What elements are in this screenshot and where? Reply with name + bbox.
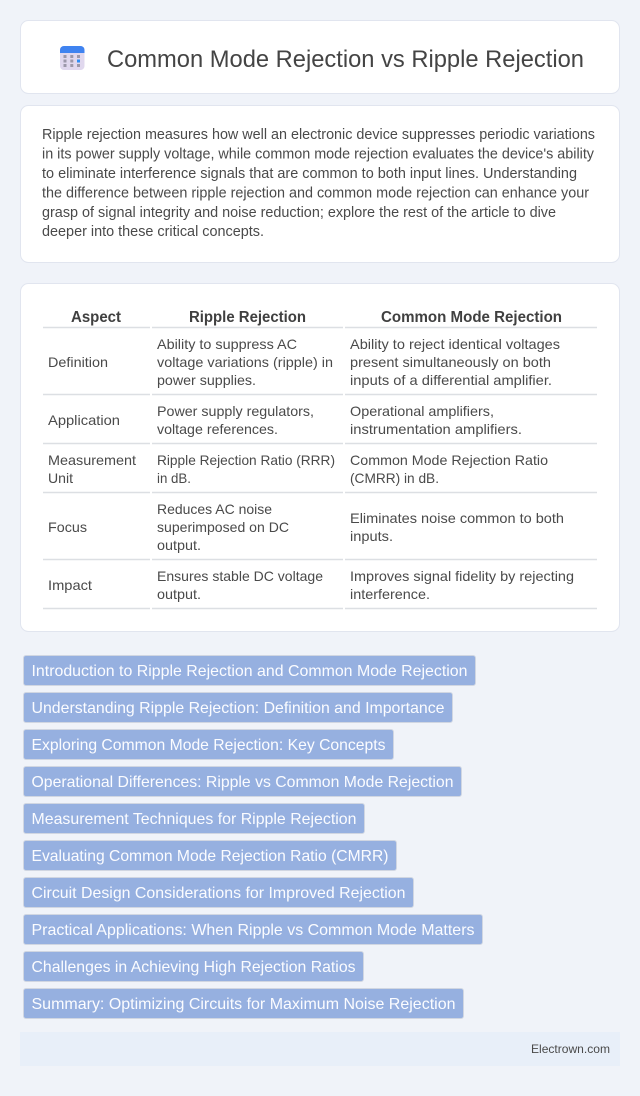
table row: definition: present simultaneously on both bbox=[350, 354, 551, 370]
link: exploring common mode rejection: Exploring Common Mode Rejection: Key Concepts bbox=[32, 737, 386, 754]
table row: application bbox=[48, 403, 522, 437]
link: measurement techniques bbox=[24, 804, 364, 834]
table row: impact: Improves signal fidelity by rejecting bbox=[350, 568, 574, 584]
link: operational differences: Operational Differences: Ripple vs Common Mode Rejection bbox=[32, 774, 454, 791]
table row: definition: Definition bbox=[48, 354, 108, 370]
table row: measurement unit: Measurement bbox=[48, 452, 136, 468]
table row: definition: power supplies. bbox=[157, 372, 256, 388]
intro text block: the difference between ripple rejection and common mode rejection can enhance your bbox=[42, 186, 589, 202]
table row: focus: Reduces AC noise bbox=[157, 501, 272, 517]
table row: definition bbox=[48, 336, 560, 388]
table row: measurement unit: Ripple Rejection Ratio (RRR) bbox=[157, 452, 335, 468]
table row: impact: output. bbox=[157, 586, 201, 602]
table row: definition: Ability to reject identical voltages bbox=[350, 336, 560, 352]
table row: impact: Impact bbox=[48, 577, 92, 593]
link: understanding ripple rejection: Understanding Ripple Rejection: Definition and Importance bbox=[32, 700, 445, 717]
link: circuit design bbox=[24, 878, 414, 908]
table row: focus: Focus bbox=[48, 519, 87, 535]
table row: measurement unit: (CMRR) in dB. bbox=[350, 470, 439, 486]
link: summary: Summary: Optimizing Circuits for Maximum Noise Rejection bbox=[32, 996, 456, 1013]
link: operational differences bbox=[24, 766, 462, 796]
table row: impact: interference. bbox=[350, 586, 430, 602]
table row: focus: output. bbox=[157, 537, 201, 553]
link: circuit design: Circuit Design Considerations for Improved Rejection bbox=[32, 885, 406, 902]
table header row: Aspect bbox=[71, 309, 122, 326]
link: understanding ripple rejection bbox=[24, 692, 452, 722]
intro text block bbox=[42, 127, 595, 240]
table row: focus bbox=[48, 501, 564, 553]
icon: calendar bbox=[60, 46, 84, 70]
table row: application: Application bbox=[48, 412, 120, 428]
table row: application: Operational amplifiers, bbox=[350, 403, 494, 419]
table row: measurement unit: Unit bbox=[48, 470, 73, 486]
footer bbox=[20, 1032, 620, 1066]
table header row: Ripple Rejection bbox=[189, 309, 306, 326]
table row: measurement unit bbox=[48, 452, 548, 486]
section links list bbox=[24, 656, 482, 1018]
link: challenges bbox=[24, 952, 364, 982]
intro text block: Ripple rejection measures how well an electronic device suppresses periodic variations bbox=[42, 127, 595, 143]
footer: Electrown.com bbox=[531, 1042, 610, 1056]
table row: definition: Ability to suppress AC bbox=[157, 336, 297, 352]
table row: application: voltage references. bbox=[157, 421, 278, 437]
link: evaluating CMRR bbox=[24, 840, 396, 870]
panel: title header bbox=[20, 20, 620, 94]
table row: impact: Ensures stable DC voltage bbox=[157, 568, 323, 584]
title: Common Mode Rejection vs Ripple Rejection bbox=[107, 46, 584, 73]
link: introduction: Introduction to Ripple Rejection and Common Mode Rejection bbox=[32, 663, 468, 680]
table row: focus: inputs. bbox=[350, 528, 393, 544]
table header row: Common Mode Rejection bbox=[381, 309, 562, 326]
intro text block: grasp of signal integrity and noise reduction; explore the rest of the article to dive bbox=[42, 205, 556, 221]
table row: impact bbox=[48, 568, 574, 602]
table row: focus: superimposed on DC bbox=[157, 519, 289, 535]
link: practical applications: Practical Applications: When Ripple vs Common Mode Matters bbox=[32, 922, 474, 939]
link: practical applications bbox=[24, 914, 482, 944]
link: exploring common mode rejection bbox=[24, 730, 394, 760]
table row: measurement unit: Common Mode Rejection Ratio bbox=[350, 452, 548, 468]
link: summary bbox=[24, 988, 464, 1018]
intro text block: in its power supply voltage, while common mode rejection evaluates the device's ability bbox=[42, 146, 595, 162]
link: challenges: Challenges in Achieving High Rejection Ratios bbox=[32, 959, 356, 976]
intro text block: deeper into these critical concepts. bbox=[42, 224, 264, 240]
table row: application: instrumentation amplifiers. bbox=[350, 421, 522, 437]
intro text block: to eliminate interference signals that are common to both input lines. Understanding bbox=[42, 166, 577, 182]
table row: application: Power supply regulators, bbox=[157, 403, 314, 419]
link: introduction bbox=[24, 656, 476, 686]
panel: introduction bbox=[20, 106, 620, 262]
table header row bbox=[71, 309, 562, 326]
table row: definition: voltage variations (ripple) in bbox=[157, 354, 333, 370]
panel: comparison table bbox=[20, 284, 620, 632]
link: evaluating CMRR: Evaluating Common Mode Rejection Ratio (CMRR) bbox=[32, 848, 388, 865]
table row: definition: inputs of a differential amplifier. bbox=[350, 372, 552, 388]
table row: focus: Eliminates noise common to both bbox=[350, 510, 564, 526]
link: measurement techniques: Measurement Techniques for Ripple Rejection bbox=[32, 811, 356, 828]
table row: measurement unit: in dB. bbox=[157, 470, 191, 486]
